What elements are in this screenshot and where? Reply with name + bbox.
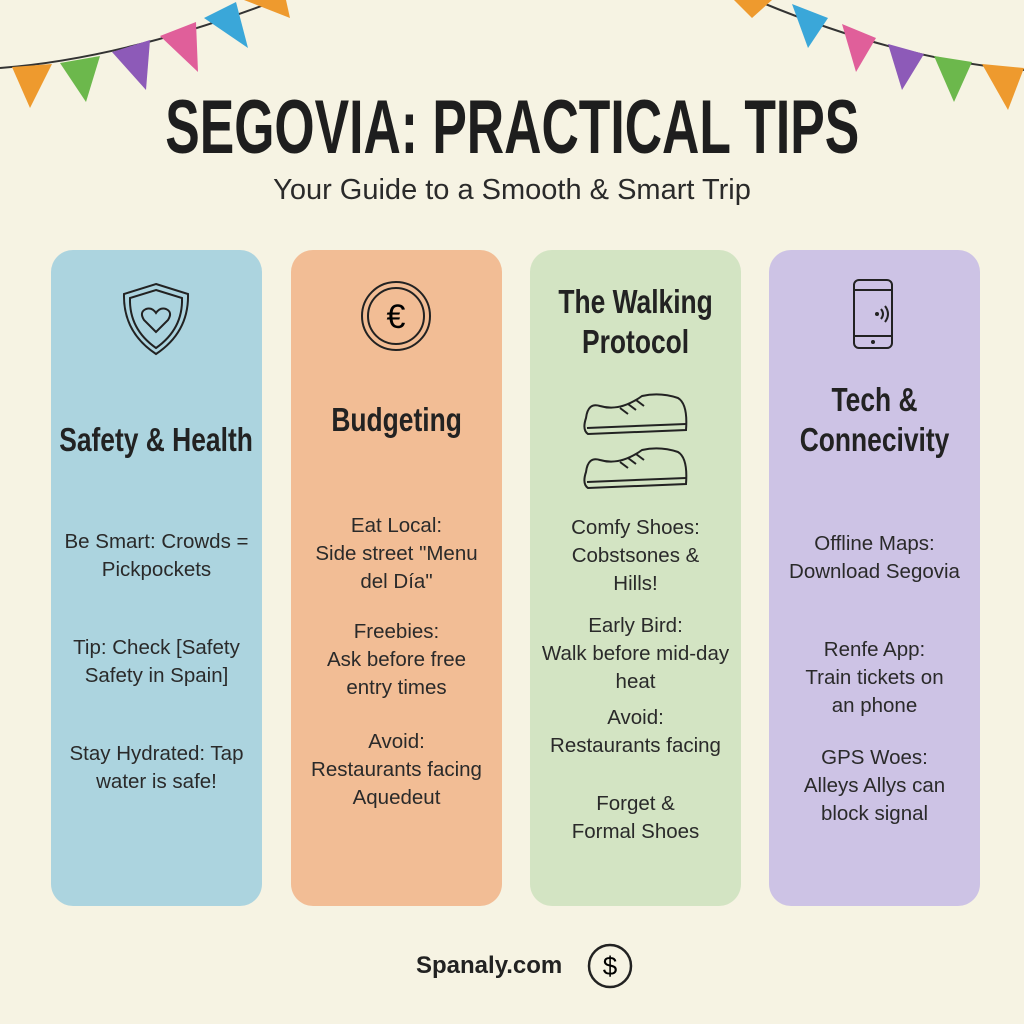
- tip: Download Segovia: [789, 560, 960, 583]
- icon: euro coin: €: [387, 298, 406, 336]
- tip: [327, 620, 466, 699]
- tip: GPS Woes:: [821, 746, 928, 769]
- tip: Hills!: [613, 572, 658, 595]
- heading: [558, 283, 713, 360]
- tip: Alleys Allys can: [804, 774, 945, 797]
- tip: [73, 636, 240, 687]
- icon: shoes: [583, 393, 688, 489]
- tip: entry times: [346, 676, 447, 699]
- tip: Cobstsones &: [572, 544, 699, 567]
- footer brand: [416, 944, 632, 988]
- tip: an phone: [832, 694, 917, 717]
- heading: The Walking: [558, 283, 713, 320]
- tip: [311, 730, 482, 809]
- tip: Offline Maps:: [814, 532, 935, 555]
- tip: Avoid:: [368, 730, 425, 753]
- heading: [800, 381, 950, 458]
- tip: Freebies:: [354, 620, 439, 643]
- tip: Pickpockets: [102, 558, 211, 581]
- bunting right: [734, 0, 1024, 110]
- tip: Safety in Spain]: [85, 664, 228, 687]
- tip: [805, 638, 944, 717]
- tip: Stay Hydrated: Tap: [70, 742, 243, 765]
- panel: walking: [530, 250, 741, 906]
- subtitle: Your Guide to a Smooth & Smart Trip: [273, 174, 751, 206]
- heading: Budgeting: [331, 401, 462, 438]
- tip: [571, 516, 700, 595]
- tip: heat: [616, 670, 655, 693]
- tip: Forget &: [596, 792, 675, 815]
- panel: tech: [769, 250, 980, 906]
- heading: Safety & Health: [60, 421, 253, 458]
- tip: [64, 530, 248, 581]
- tip: Ask before free: [327, 648, 466, 671]
- tip: Restaurants facing: [550, 734, 721, 757]
- panel: budgeting: [291, 250, 502, 906]
- heading: Protocol: [582, 323, 689, 360]
- icon: dollar coin: [588, 944, 632, 988]
- icon: shield heart: [122, 283, 190, 356]
- panel: safety & health: [51, 250, 262, 906]
- heading: Tech &: [831, 381, 918, 418]
- tip: Formal Shoes: [572, 820, 699, 843]
- tip: [70, 742, 243, 793]
- tip: Comfy Shoes:: [571, 516, 700, 539]
- title: SEGOVIA: PRACTICAL TIPS: [165, 85, 859, 170]
- tip: water is safe!: [96, 770, 217, 793]
- tip: Eat Local:: [351, 514, 442, 537]
- icon: euro coin: [361, 281, 431, 351]
- tip: [542, 614, 729, 693]
- tip: [804, 746, 945, 825]
- tip: Avoid:: [607, 706, 664, 729]
- icon: dollar coin: $: [603, 951, 618, 981]
- tip: Side street "Menu: [315, 542, 478, 565]
- bunting left: [0, 0, 290, 108]
- tip: Renfe App:: [824, 638, 925, 661]
- tip: block signal: [821, 802, 928, 825]
- tip: del Día": [360, 570, 433, 593]
- tip: [315, 514, 478, 593]
- heading: Connecivity: [800, 421, 949, 458]
- tip: Tip: Check [Safety: [73, 636, 240, 659]
- tip: [572, 792, 699, 843]
- icon: phone: [853, 279, 893, 349]
- tip: Be Smart: Crowds =: [64, 530, 248, 553]
- tip: Restaurants facing: [311, 758, 482, 781]
- brand text: Spanaly.com: [416, 952, 562, 979]
- tip: Early Bird:: [588, 614, 683, 637]
- tip: [789, 532, 960, 583]
- tip: Train tickets on: [805, 666, 944, 689]
- tip: [550, 706, 721, 757]
- tip: Walk before mid-day: [542, 642, 729, 665]
- tip: Aquedeut: [353, 786, 440, 809]
